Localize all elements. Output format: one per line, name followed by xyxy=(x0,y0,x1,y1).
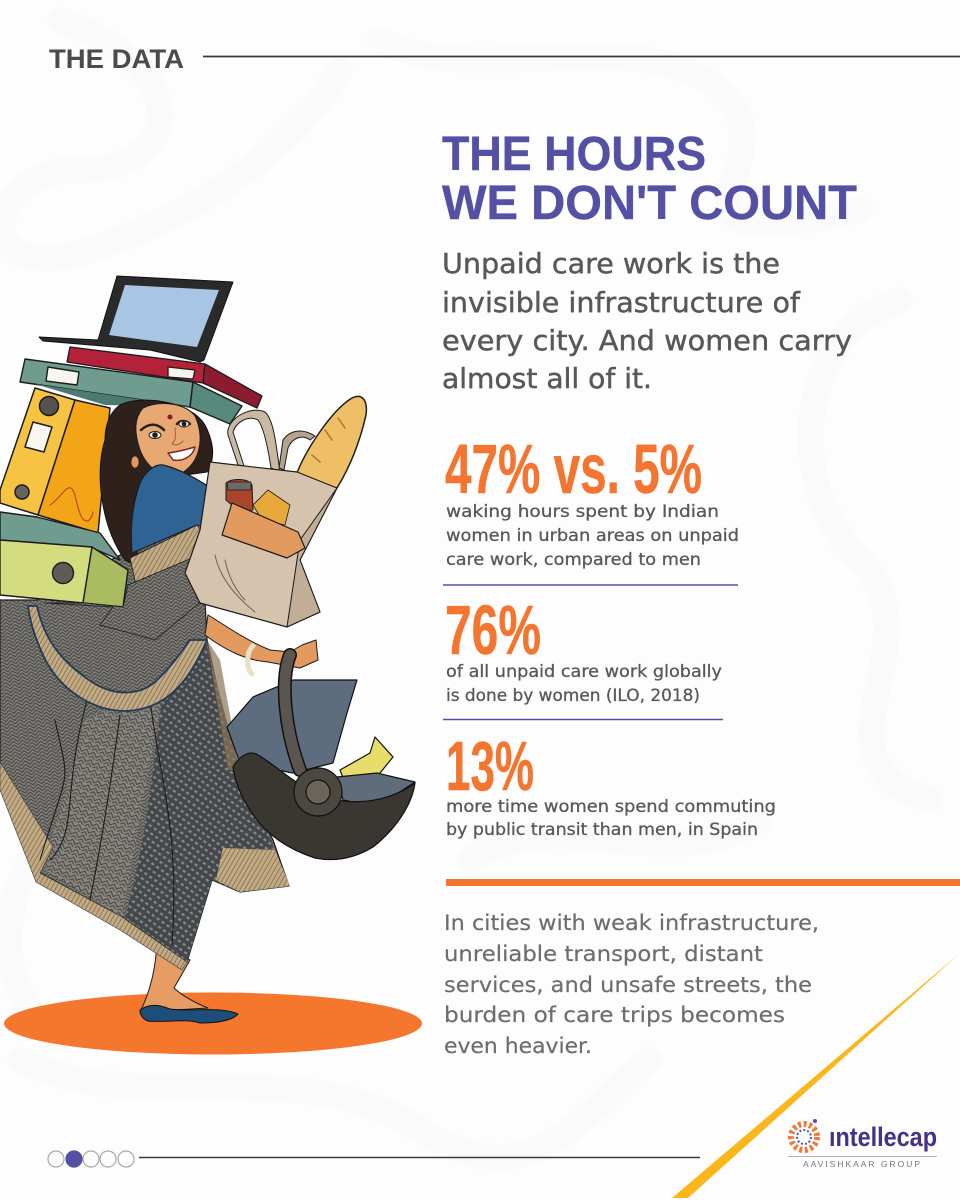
logo: intellecap: AAVISHKAAR GROUP xyxy=(803,1159,920,1169)
stat: 13%: more time women spend commuting xyxy=(446,797,776,817)
stat: 47% vs. 5%: care work, compared to men xyxy=(446,550,701,570)
ground ellipse xyxy=(4,992,422,1054)
green binder xyxy=(0,540,128,607)
lower teal binder xyxy=(0,512,120,560)
stat: 76% xyxy=(445,591,722,706)
stat: 76%: 76% xyxy=(445,591,541,669)
yellow binder xyxy=(0,388,110,533)
lower arm and bangle xyxy=(205,615,318,674)
section label: THE DATA: THE DATA xyxy=(49,44,184,74)
face xyxy=(131,404,200,475)
bodice sari band xyxy=(130,525,205,585)
stat: 47% vs. 5%: women in urban areas on unpaid xyxy=(446,526,739,546)
blouse xyxy=(131,465,232,553)
intro text: invisible infrastructure of xyxy=(442,286,801,319)
grocery bag xyxy=(185,396,366,627)
stat: 47% vs. 5% xyxy=(445,430,739,570)
teal book xyxy=(20,359,242,424)
stat: 13%: 13% xyxy=(446,727,534,805)
stat: 13%: by public transit than men, in Spain xyxy=(446,820,758,840)
stat: 13% xyxy=(446,727,776,840)
stat: 76%: is done by women (ILO, 2018) xyxy=(446,686,700,706)
intro text xyxy=(442,247,852,395)
illustration: woman carrying care load xyxy=(0,276,415,1023)
closing paragraph: services, and unsafe streets, the xyxy=(444,973,812,998)
title: THE HOURS xyxy=(442,127,706,181)
closing paragraph: unreliable transport, distant xyxy=(444,942,763,967)
closing paragraph: burden of care trips becomes xyxy=(444,1003,785,1028)
pagination dots xyxy=(48,1151,134,1167)
laptop xyxy=(39,276,233,362)
red book xyxy=(67,347,262,408)
closing paragraph xyxy=(444,911,819,1059)
title xyxy=(442,127,857,230)
yellow diagonal stripe xyxy=(672,953,960,1198)
sari skirt xyxy=(0,525,290,970)
sari drape border xyxy=(28,606,207,711)
intro text: every city. And women carry xyxy=(442,324,852,357)
logo: intellecap xyxy=(788,1119,937,1169)
title: WE DON'T COUNT xyxy=(442,176,857,230)
intro text: almost all of it. xyxy=(442,362,652,395)
closing paragraph: In cities with weak infrastructure, xyxy=(444,911,819,936)
orange divider bar xyxy=(446,879,960,886)
stat: 47% vs. 5%: 47% vs. 5% xyxy=(445,430,702,508)
closing paragraph: even heavier. xyxy=(444,1034,592,1059)
stat: 76%: of all unpaid care work globally xyxy=(446,662,722,682)
leg and shoe xyxy=(140,940,238,1023)
logo: intellecap: ıntellecap xyxy=(829,1122,937,1152)
intro text: Unpaid care work is the xyxy=(442,247,780,280)
arm around bag xyxy=(222,503,305,558)
baby car seat xyxy=(227,655,415,860)
stat: 47% vs. 5%: waking hours spent by Indian xyxy=(446,502,719,522)
hair xyxy=(100,400,213,565)
